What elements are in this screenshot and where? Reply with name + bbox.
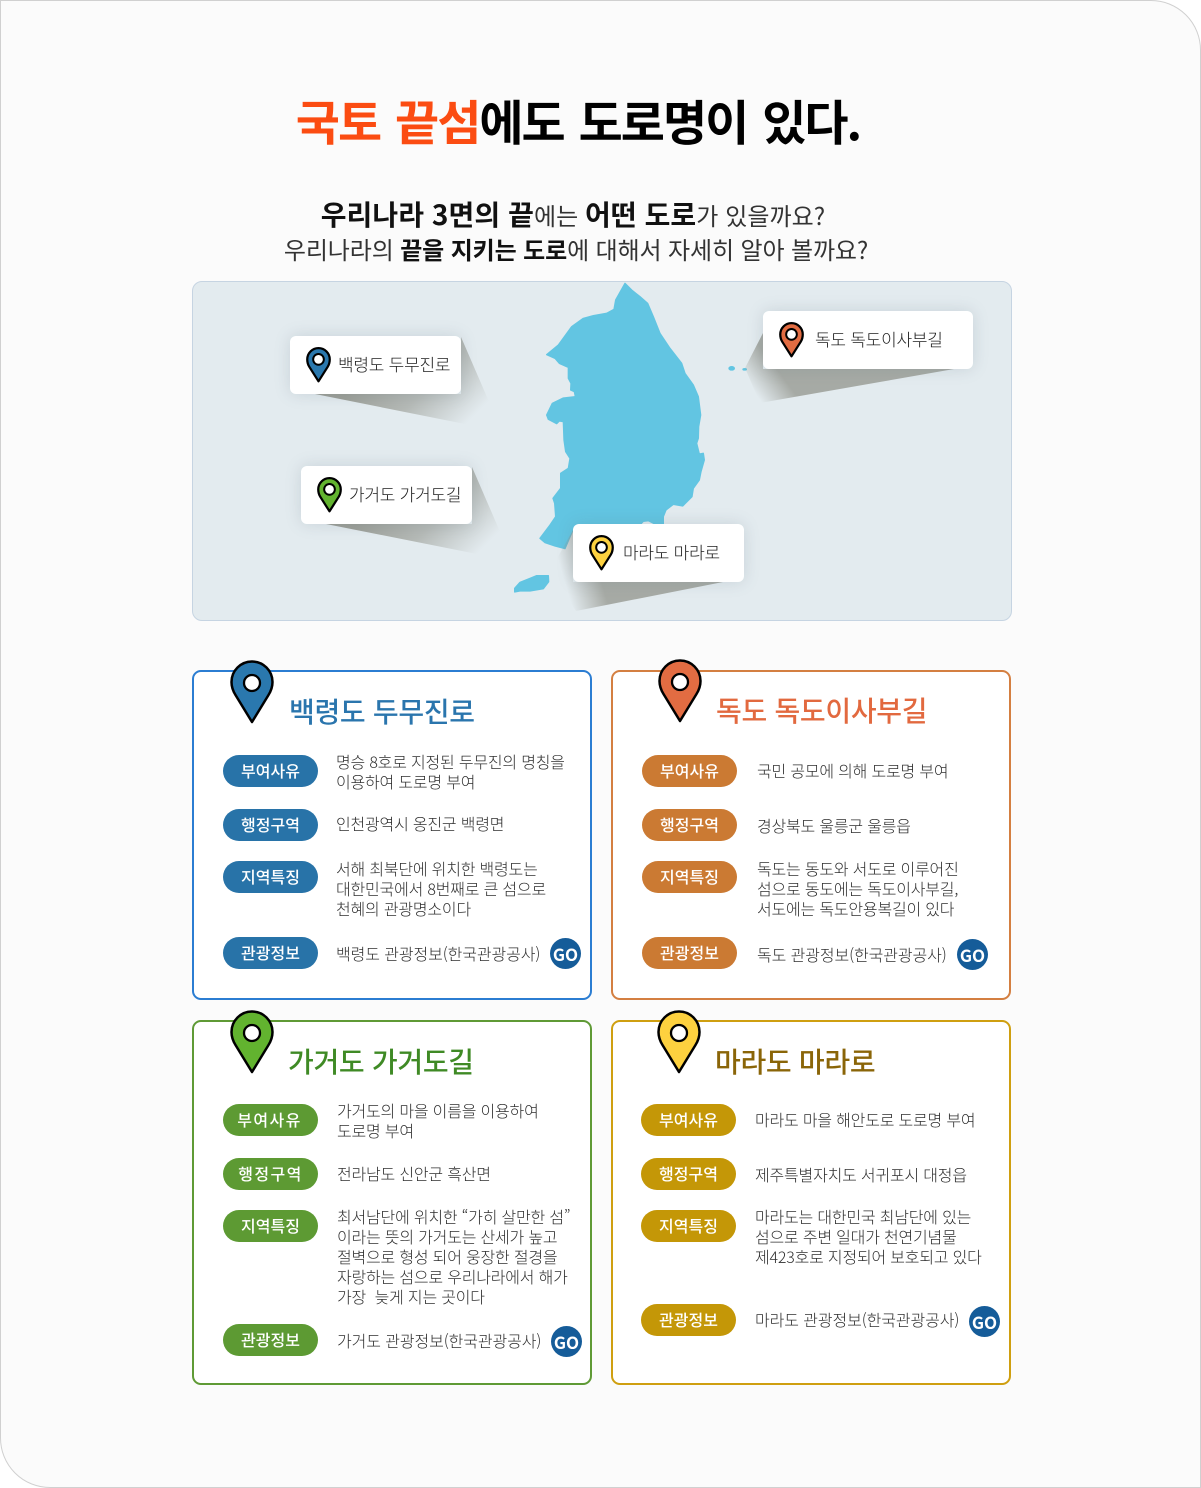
tag: tourism (223, 937, 318, 969)
Korean peninsula (515, 283, 746, 592)
tag: district: 행정구역 (659, 1161, 718, 1185)
tag: reason: 부여사유 (659, 1107, 718, 1131)
panel: Gageodo card (192, 1010, 592, 1385)
button: GO (969, 1306, 1000, 1337)
map illustration with label shadows (316, 282, 954, 610)
button: GO (957, 939, 988, 970)
shadow: Gageodo label (326, 467, 501, 555)
tag: district (641, 1158, 736, 1190)
button: GO (551, 1326, 582, 1357)
icon: blue pin (306, 347, 331, 382)
text: reason: 가거도의 마을 이름을 이용하여 (337, 1098, 539, 1122)
label: Dokdo (763, 311, 973, 369)
tag: features: 지역특징 (659, 1213, 718, 1237)
text: reason: 마라도 마을 해안도로 도로명 부여 (755, 1107, 975, 1131)
shadow: Baengnyeongdo label (315, 337, 490, 425)
text: features: 독도는 동도와 서도로 이루어진 (757, 856, 959, 880)
text: district: 인천광역시 옹진군 백령면 (336, 811, 504, 835)
panel: Baengnyeongdo card (192, 660, 592, 1000)
text: district: 경상북도 울릉군 울릉읍 (757, 813, 911, 837)
button: GO: GO (972, 1309, 997, 1334)
text: reason: 명승 8호로 지정된 두무진의 명칭을 (336, 749, 565, 773)
text: features: 이라는 뜻의 가거도는 산세가 높고 (337, 1224, 557, 1248)
panel: Marado card (611, 1010, 1011, 1385)
text: reason: 이용하여 도로명 부여 (336, 769, 475, 793)
text: features: 자랑하는 섬으로 우리나라에서 해가 (337, 1264, 568, 1288)
text: tourism: 독도 관광정보(한국관광공사) (757, 942, 947, 966)
text: features: 천혜의 관광명소이다 (336, 896, 471, 920)
tag: reason (223, 755, 318, 787)
tag: district: 행정구역 (660, 812, 719, 836)
icon: green pin (317, 477, 342, 512)
tag: tourism: 관광정보 (241, 940, 300, 964)
tag: features (223, 861, 318, 893)
button: GO: GO (960, 942, 985, 967)
text: tourism: 가거도 관광정보(한국관광공사) (337, 1328, 541, 1352)
panel: map of Korea (192, 281, 1012, 621)
subtitle line 2: 우리나라의 끝을 지키는 도로에 대해서 자세히 알아 볼까요? (284, 231, 868, 266)
text: features (337, 1204, 570, 1308)
panel: Dokdo card (611, 659, 1011, 1000)
tag: reason: 부여사유 (660, 758, 719, 782)
button: GO: GO (553, 941, 578, 966)
tag: tourism (223, 1324, 318, 1356)
tag: reason (642, 755, 737, 787)
text: features: 마라도는 대한민국 최남단에 있는 (755, 1204, 971, 1228)
tag: features (642, 861, 737, 893)
tag: tourism: 관광정보 (241, 1327, 300, 1351)
tag: reason: 부여사유 (237, 1107, 302, 1131)
icon: large blue pin (230, 660, 274, 724)
text: features: 제423호로 지정되어 보호되고 있다 (755, 1244, 982, 1268)
heading: 독도 독도이사부길 (716, 690, 927, 730)
heading: 백령도 두무진로 (289, 691, 475, 731)
text: features: 최서남단에 위치한 “가히 살만한 섬” (337, 1204, 570, 1228)
text: features: 섬으로 동도에는 독도이사부길, (757, 876, 958, 900)
tag: district (223, 1158, 318, 1190)
label text: 가거도 가거도길 (349, 481, 461, 506)
text: reason (337, 1098, 539, 1142)
text: features: 서해 최북단에 위치한 백령도는 (336, 856, 538, 880)
text: district: 제주특별자치도 서귀포시 대정읍 (755, 1162, 967, 1186)
tag: features: 지역특징 (660, 864, 719, 888)
text: features: 섬으로 주변 일대가 천연기념물 (755, 1224, 957, 1248)
text: district: 전라남도 신안군 흑산면 (337, 1161, 491, 1185)
tag: reason: 부여사유 (241, 758, 300, 782)
tag: district: 행정구역 (238, 1161, 303, 1185)
text: features: 절벽으로 형성 되어 웅장한 절경을 (337, 1244, 557, 1268)
tag: features (641, 1210, 736, 1242)
text: features: 서도에는 독도안용복길이 있다 (757, 896, 954, 920)
tag: features (223, 1210, 318, 1242)
tag: district (642, 809, 737, 841)
text: tourism: 마라도 관광정보(한국관광공사) (755, 1307, 959, 1331)
label text: 독도 독도이사부길 (815, 326, 943, 351)
tag: tourism: 관광정보 (660, 940, 719, 964)
text: reason (336, 749, 565, 793)
label: Baengnyeongdo (290, 336, 461, 394)
label: Gageodo (301, 466, 472, 524)
text: reason: 국민 공모에 의해 도로명 부여 (757, 758, 948, 782)
text: reason: 도로명 부여 (337, 1118, 414, 1142)
text: features: 가장 늦게 지는 곳이다 (337, 1284, 485, 1308)
text: features (757, 856, 959, 920)
tag: district: 행정구역 (241, 812, 300, 836)
shadow: Marado label (550, 530, 723, 611)
button: GO (550, 938, 581, 969)
title: 국토 끝섬에도 도로명이 있다. (296, 84, 860, 154)
tag: features: 지역특징 (241, 864, 300, 888)
tag: tourism (642, 937, 737, 969)
subtitle line 1: 우리나라 3면의 끝에는 어떤 도로가 있을까요? (321, 194, 825, 234)
text: features (755, 1204, 982, 1268)
heading: 마라도 마라로 (715, 1041, 875, 1081)
text: features: 대한민국에서 8번째로 큰 섬으로 (336, 876, 546, 900)
tag: district (223, 809, 318, 841)
tag: tourism (641, 1304, 736, 1336)
shadow: Dokdo label (745, 333, 954, 403)
text: tourism: 백령도 관광정보(한국관광공사) (336, 941, 540, 965)
tag: reason (641, 1104, 736, 1136)
button: GO: GO (554, 1329, 579, 1354)
label text: 마라도 마라로 (623, 539, 720, 564)
icon: yellow pin (589, 535, 614, 570)
icon: large green pin (230, 1010, 274, 1074)
tag: features: 지역특징 (241, 1213, 300, 1237)
icon: large orange pin (658, 659, 702, 722)
icon: orange pin (779, 322, 804, 358)
tag: tourism: 관광정보 (659, 1307, 718, 1331)
label: Marado (573, 524, 744, 582)
icon: large yellow pin (657, 1010, 701, 1074)
heading: 가거도 가거도길 (288, 1041, 474, 1081)
label text: 백령도 두무진로 (338, 351, 450, 376)
text: features (336, 856, 546, 920)
tag: reason (223, 1104, 318, 1136)
